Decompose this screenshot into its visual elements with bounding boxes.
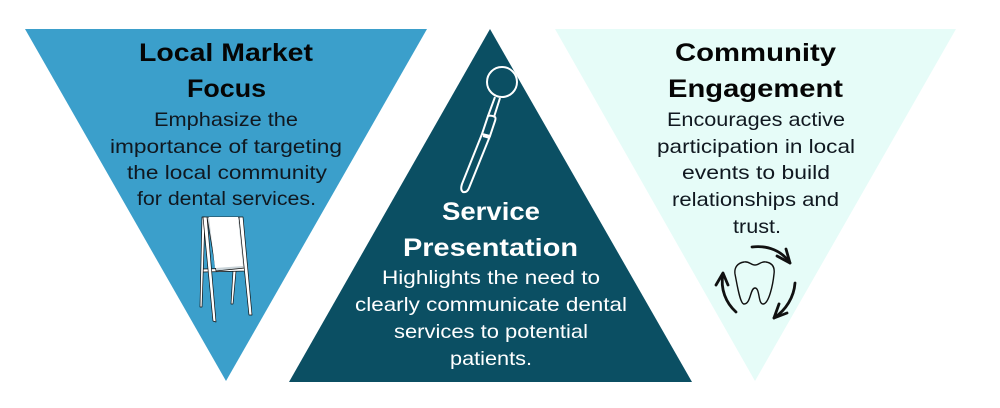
icon: flip chart easel — [200, 217, 252, 322]
heading: service presentation: Presentation — [403, 234, 578, 262]
heading: local market focus — [139, 39, 314, 103]
icon: dental mirror — [461, 67, 517, 192]
panel: community engagement — [555, 29, 956, 381]
triangle: community engagement background — [555, 29, 956, 381]
icon: cycle arrows — [716, 247, 795, 318]
heading: community engagement: Community — [675, 39, 836, 67]
text: community engagement description — [657, 109, 855, 238]
text: community engagement description: events to build — [682, 162, 830, 184]
heading: community engagement: Engagement — [668, 75, 844, 103]
text: community engagement description: Encourages active — [667, 109, 845, 131]
triangle: service presentation background — [289, 29, 692, 382]
text: service presentation description: services to potential — [394, 321, 588, 343]
text: local market focus description: importance of targeting — [110, 136, 342, 158]
heading: local market focus: Local Market — [139, 39, 314, 67]
triangle: local market focus background — [25, 29, 427, 381]
heading: local market focus: Focus — [187, 75, 266, 103]
text: service presentation description: clearly communicate dental — [355, 294, 627, 316]
text: service presentation description — [355, 267, 627, 370]
panel: service presentation — [289, 29, 692, 382]
heading: service presentation — [403, 198, 578, 262]
text: local market focus description — [110, 109, 342, 210]
text: community engagement description: participation in local — [657, 136, 855, 158]
panel: local market focus — [25, 29, 427, 381]
icon: tooth with cycle arrows — [716, 247, 795, 318]
text: local market focus description: Emphasize the — [154, 109, 298, 131]
heading: service presentation: Service — [442, 198, 540, 226]
text: community engagement description: relationships and — [672, 189, 839, 211]
icon: tooth — [735, 262, 774, 304]
text: community engagement description: trust. — [733, 216, 781, 238]
text: service presentation description: Highlights the need to — [382, 267, 600, 289]
text: local market focus description: for dental services. — [137, 188, 316, 210]
heading: community engagement — [668, 39, 844, 103]
text: service presentation description: patients. — [450, 348, 532, 370]
text: local market focus description: the local community — [127, 162, 327, 184]
